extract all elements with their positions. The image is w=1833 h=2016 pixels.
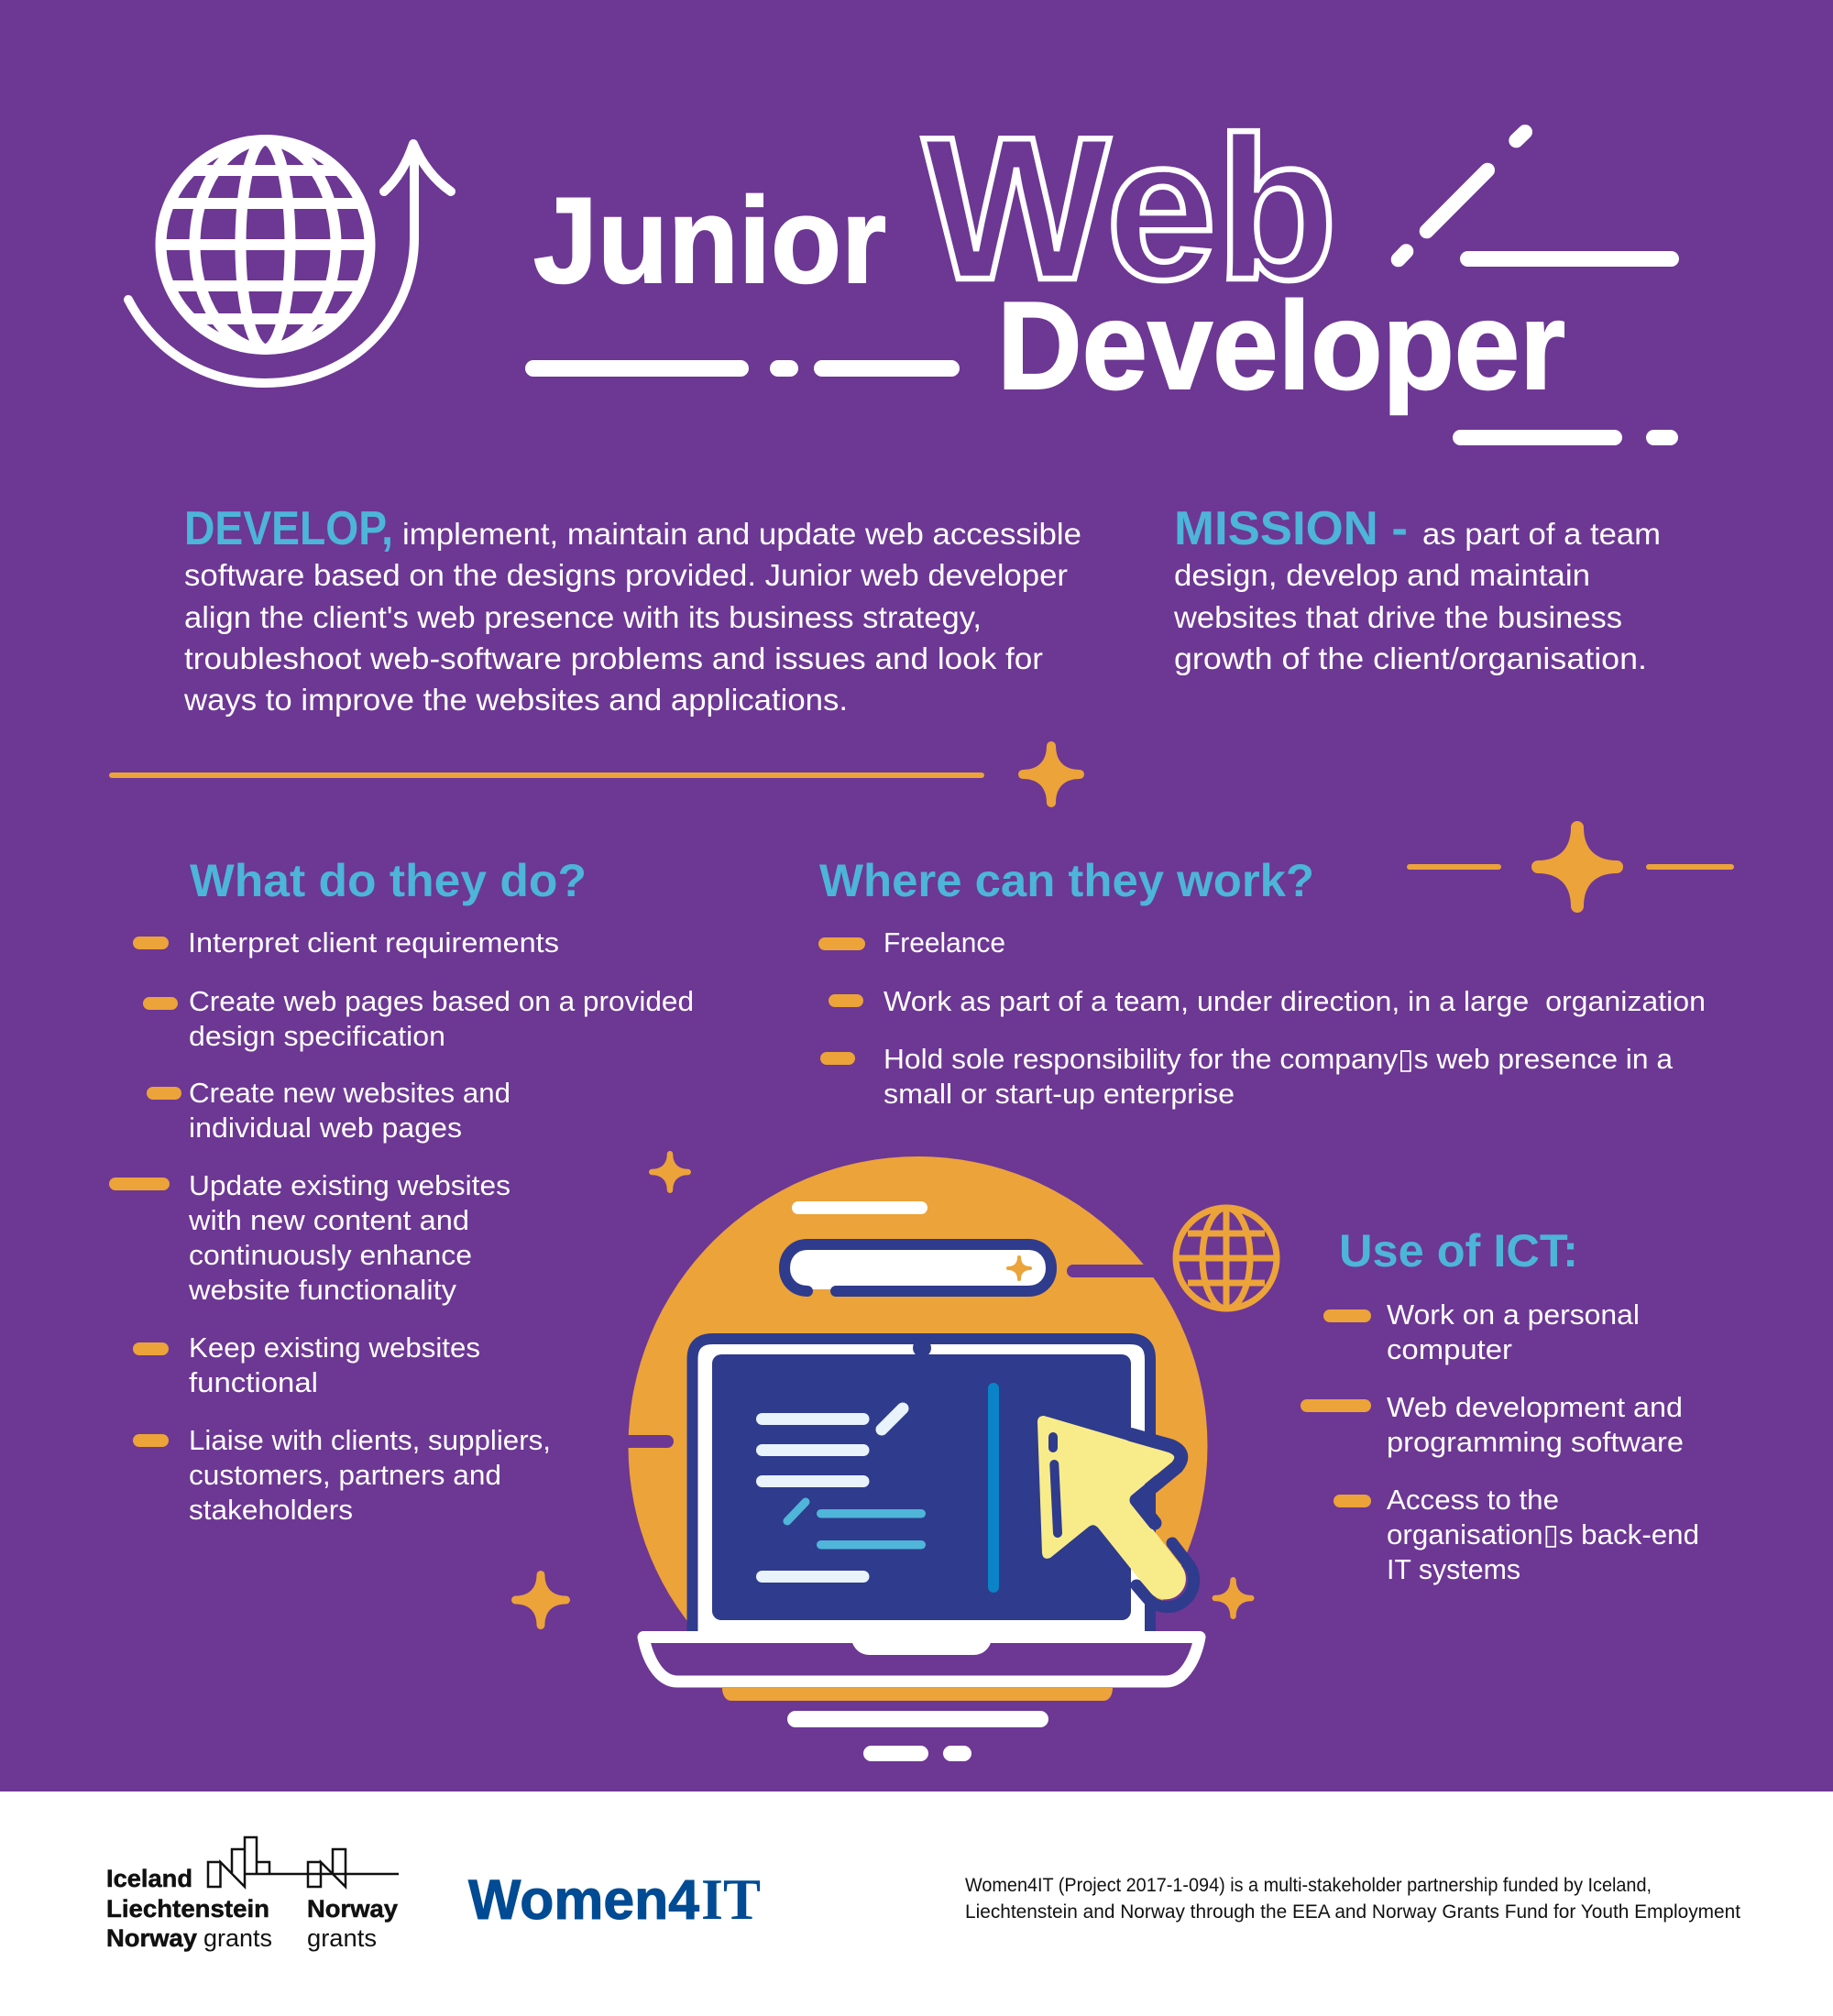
list: use of ict: programming software [1387, 1426, 1684, 1458]
panel: use of ict [1301, 1225, 1699, 1585]
icon: small globe [1176, 1208, 1277, 1309]
title: Junior [533, 173, 886, 309]
list: what do they do: Keep existing websites [189, 1331, 480, 1364]
list: use of ict: Work on a personal [1387, 1298, 1640, 1331]
logo: Norway grants [307, 1895, 398, 1952]
footer background [0, 1791, 1833, 2016]
bullets: use of ict [1301, 1309, 1371, 1507]
list: what do they do: Update existing websites [189, 1169, 510, 1201]
list: where can they work: Work as part of a team, under direction, in a large organization [884, 985, 1706, 1017]
text block: develop [183, 502, 1081, 717]
footer note: Women4IT (Project 2017-1-094) is a multi-stakeholder partnership funded by Iceland, [965, 1875, 1652, 1896]
divider with sparkle [109, 741, 1084, 807]
logo: EEA grants: Norway [106, 1924, 197, 1952]
logo: EEA grants [106, 1837, 399, 1952]
title [533, 95, 1565, 415]
text block: mission: growth of the client/organisation. [1174, 641, 1647, 675]
panel: where can they work [818, 855, 1706, 1110]
footer note: Liechtenstein and Norway through the EEA and Norway Grants Fund for Youth Employment [965, 1901, 1740, 1923]
bullets: what do they do [109, 937, 181, 1447]
footer note [965, 1875, 1740, 1923]
list: what do they do [188, 926, 694, 1526]
icon: globe with rising arrow [128, 140, 451, 383]
heading: where can they work: Where can they work? [819, 855, 1314, 906]
logo: EEA grants: grants [203, 1924, 272, 1952]
list: what do they do: design specification [189, 1020, 445, 1052]
list: what do they do: individual web pages [189, 1112, 462, 1144]
panel: what do they do [109, 855, 694, 1526]
list: where can they work [884, 926, 1706, 1110]
list: what do they do: with new content and [188, 1204, 469, 1236]
title: Web [923, 95, 1337, 323]
list: where can they work: small or start-up enterprise [884, 1078, 1235, 1110]
logo: Norway grants: grants [307, 1924, 377, 1952]
text block: develop: software based on the designs provided. Junior web developer [184, 558, 1068, 592]
list: use of ict: IT systems [1387, 1553, 1520, 1585]
list: use of ict [1387, 1298, 1699, 1585]
illustration: laptop with cursor [511, 1151, 1277, 1761]
list: use of ict: Access to the [1387, 1484, 1559, 1516]
list: where can they work: Hold sole responsibility for the company▯s web presence in a [884, 1043, 1674, 1075]
list: what do they do: Interpret client requirements [188, 926, 559, 959]
text block: develop: DEVELOP, [184, 502, 393, 555]
logo: EEA grants: Iceland [106, 1865, 192, 1892]
list: use of ict: Web development and [1387, 1391, 1683, 1423]
bullets: where can they work [818, 937, 865, 1065]
text block: develop: implement, maintain and update web accessible [402, 517, 1081, 551]
text block: develop: ways to improve the websites and applications. [183, 683, 848, 717]
list: use of ict: computer [1387, 1333, 1512, 1365]
title decorative dashes [525, 132, 1679, 445]
logo: EEA grants: Liechtenstein [106, 1895, 269, 1923]
list: what do they do: Create new websites and [189, 1077, 510, 1109]
list: what do they do: website functionality [188, 1274, 457, 1306]
list: what do they do: Liaise with clients, suppliers, [189, 1424, 551, 1456]
search bar label line [792, 1201, 927, 1214]
text block: mission: websites that drive the business [1173, 600, 1622, 634]
heading: use of ict: Use of ICT: [1339, 1225, 1578, 1276]
list: what do they do: functional [189, 1366, 318, 1398]
decoration: sparkle with lines [1407, 821, 1734, 913]
text block: mission: design, develop and maintain [1174, 558, 1590, 592]
title: Developer [997, 276, 1565, 415]
list: use of ict: organisation▯s back-end [1387, 1518, 1699, 1550]
laptop base [643, 1637, 1200, 1761]
list: what do they do: customers, partners and [189, 1459, 501, 1491]
list: what do they do: Create web pages based on a provided [189, 985, 694, 1017]
list: what do they do: continuously enhance [189, 1239, 472, 1271]
sparkles [511, 1151, 1254, 1629]
text block: mission: as part of a team [1422, 517, 1661, 551]
circle notches [596, 1265, 1195, 1448]
list: what do they do: stakeholders [189, 1494, 353, 1526]
search bar [785, 1244, 1051, 1291]
heading: what do they do: What do they do? [190, 855, 587, 906]
logo: Norway grants: Norway [307, 1895, 398, 1923]
text block: develop: troubleshoot web-software problems and issues and look for [184, 641, 1043, 675]
logo: Women4IT: IT [701, 1867, 761, 1932]
screen code lines [756, 1383, 999, 1593]
text block: develop: align the client's web presence with its business strategy, [184, 600, 982, 634]
laptop frame [693, 1339, 1150, 1649]
cursor arrow [1037, 1416, 1194, 1607]
text block: mission: MISSION - [1174, 502, 1408, 555]
logo: Women4IT: Women4 [468, 1868, 699, 1931]
list: where can they work: Freelance [884, 926, 1005, 959]
orange circle backdrop [629, 1156, 1208, 1620]
text block: mission [1173, 502, 1661, 675]
